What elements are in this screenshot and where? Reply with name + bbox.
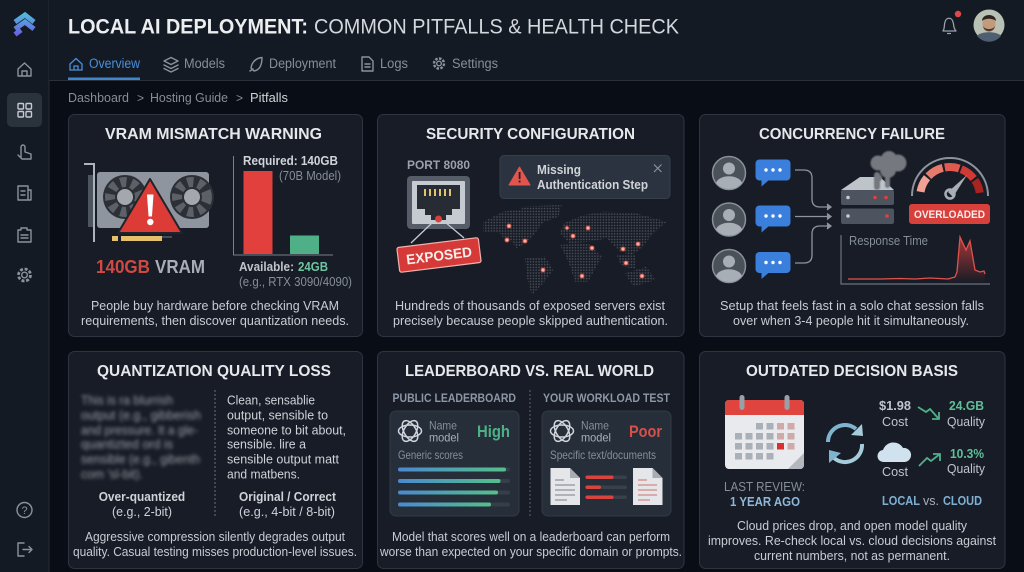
description	[379, 529, 682, 559]
local cost and quality: Quality	[947, 414, 985, 429]
description: improves. Re-check local vs. cloud decisions against	[708, 533, 996, 548]
icon: active grid tile	[7, 93, 42, 127]
description: Model that scores well on a leaderboard can perform	[392, 529, 670, 544]
column label: public leaderboard: PUBLIC LEADERBOARD	[392, 391, 516, 405]
nav tab: logs	[362, 56, 408, 71]
mismatch bars	[586, 476, 627, 499]
label: last review: 1 YEAR AGO	[730, 494, 800, 509]
description: Cloud prices drop, and open model quality	[737, 518, 967, 533]
heading: SECURITY CONFIGURATION	[426, 126, 635, 143]
nav tab: overview	[68, 56, 140, 80]
cloud cost and quality	[877, 442, 985, 479]
avatar	[974, 10, 1004, 42]
clean output text: sensible. lire a	[227, 436, 307, 452]
card: public leaderboard: model	[429, 430, 459, 444]
clean output text: sensible output matt	[227, 452, 339, 466]
icon: exit	[18, 543, 32, 556]
local cost and quality	[879, 398, 985, 429]
panel: VRAM mismatch warning	[68, 114, 362, 336]
blurred over-quantized output text: com 'sl-bit).	[81, 466, 143, 482]
breadcrumb: >	[236, 91, 243, 105]
chart: dotted world map with exposed servers	[483, 205, 666, 294]
icon: output document	[633, 468, 662, 505]
label: local vs cloud: CLOUD	[943, 493, 982, 508]
local cost and quality: 24.GB	[949, 398, 984, 413]
nav tab: models	[164, 56, 225, 72]
icon: help: ?	[21, 505, 28, 517]
heading: QUANTIZATION QUALITY LOSS	[97, 363, 331, 380]
alert: missing authentication step: Missing	[537, 162, 581, 177]
clean output text: and matbens.	[227, 466, 300, 482]
local cost and quality: Cost	[882, 414, 908, 429]
description	[708, 518, 996, 563]
icon: ethernet port exposed	[397, 176, 481, 272]
description: requirements, then discover quantization needs.	[81, 313, 349, 328]
blurred over-quantized output text: This is ra blurrish	[81, 392, 173, 408]
breadcrumb: Pitfalls	[250, 90, 288, 105]
blurred over-quantized output text: output (e.g., gibberish	[81, 408, 201, 422]
title	[68, 16, 679, 38]
icon: refresh cycle	[828, 424, 863, 463]
panel: concurrency failure	[700, 114, 1005, 336]
description: current numbers, not as permanent.	[754, 548, 950, 563]
description	[393, 298, 668, 328]
card: public leaderboard: Name	[429, 418, 457, 432]
card: your workload test: model	[581, 430, 611, 444]
label: 140GB VRAM: 140GB	[96, 257, 150, 277]
icon: notification bell	[943, 11, 961, 34]
description: worse than expected on your specific domain or prompts.	[379, 544, 682, 559]
description	[720, 298, 984, 328]
arrows into server	[795, 170, 831, 263]
blurred over-quantized output text: quantizted ord is	[81, 436, 173, 452]
panel: quantization quality loss	[68, 352, 362, 568]
icon: clipboard	[18, 228, 31, 242]
icon: logo	[15, 15, 34, 34]
icon: settings gear	[18, 269, 30, 281]
heading: OUTDATED DECISION BASIS	[746, 363, 958, 380]
stamp: exposed: EXPOSED	[405, 244, 473, 267]
label: 140GB VRAM	[96, 257, 205, 277]
line chart: response time	[841, 233, 990, 284]
icon: home	[18, 63, 31, 76]
card: your workload test	[542, 411, 671, 516]
labels: over-quantized: Over-quantized	[99, 489, 185, 504]
alert: missing authentication step: Authentication Step	[537, 177, 648, 192]
description: People buy hardware before checking VRAM	[91, 298, 339, 313]
clean output text: output, sensible to	[227, 408, 328, 422]
breadcrumb: Hosting Guide	[150, 90, 228, 105]
labels: over-quantized: (e.g., 2-bit)	[112, 504, 172, 519]
labels: original / correct: Original / Correct	[239, 489, 337, 504]
heading: VRAM MISMATCH WARNING	[105, 126, 322, 143]
label: local vs cloud: vs.	[923, 493, 939, 508]
label: last review: LAST REVIEW:	[724, 479, 805, 494]
blurred over-quantized output text	[81, 392, 201, 482]
title: LOCAL AI DEPLOYMENT:	[68, 16, 308, 38]
label: last review	[724, 479, 805, 509]
cloud cost and quality: Quality	[947, 461, 985, 476]
icon: help	[17, 502, 32, 518]
description: quality. Casual testing misses production-level issues.	[73, 544, 357, 559]
blurred over-quantized output text: and pressure. It a gle-	[81, 422, 198, 438]
description	[81, 298, 349, 328]
column label: your workload test: YOUR WORKLOAD TEST	[543, 391, 671, 405]
icon: graphics card with warning	[84, 164, 214, 242]
labels: original / correct	[239, 489, 337, 519]
icon: news	[18, 186, 31, 200]
bar chart: required vs available	[234, 153, 352, 289]
bar chart: required vs available: (e.g., RTX 3090/4090)	[239, 274, 352, 289]
description: Aggressive compression silently degrades output	[85, 529, 345, 544]
panel: leaderboard vs real world	[378, 352, 684, 568]
icon group: users with chat bubbles	[712, 156, 790, 282]
breadcrumb: Dashboard	[68, 90, 129, 105]
nav tab: logs: Logs	[380, 56, 408, 71]
sidebar	[0, 0, 49, 572]
local cost and quality: $1.98	[879, 398, 911, 413]
nav tab: overview: Overview	[89, 56, 140, 71]
label: local vs cloud: LOCAL	[882, 493, 920, 508]
description: precisely because people skipped authentication.	[393, 313, 668, 328]
alert: missing authentication step	[500, 156, 670, 198]
nav tab: deployment: Deployment	[269, 56, 336, 71]
breadcrumb: >	[137, 91, 144, 105]
labels: original / correct: (e.g., 4-bit / 8-bit)	[239, 504, 335, 519]
clean output text: Clean, sensablie	[227, 392, 315, 408]
heading: CONCURRENCY FAILURE	[759, 126, 945, 143]
card: public leaderboard: Generic scores	[398, 448, 463, 462]
bar chart: required vs available: Required: 140GB	[243, 153, 338, 168]
description: over when 3-4 people hit it simultaneously.	[733, 313, 969, 328]
card: your workload test: Specific text/documents	[550, 448, 656, 462]
nav tab: settings: Settings	[452, 56, 498, 71]
icon: touch hand	[18, 145, 31, 159]
cloud cost and quality: 10.3%	[950, 446, 984, 461]
line chart: response time: Response Time	[849, 233, 928, 248]
icon: source document	[550, 468, 580, 505]
description: Hundreds of thousands of exposed servers exist	[395, 298, 665, 313]
bar chart: required vs available: 24GB	[298, 259, 328, 274]
bar chart: required vs available: Available:	[239, 259, 294, 274]
description	[73, 529, 357, 559]
card: your workload test: Poor	[629, 422, 662, 441]
label: port 8080: PORT 8080	[407, 158, 470, 172]
panel: security configuration	[378, 114, 684, 336]
heading: LEADERBOARD VS. REAL WORLD	[405, 363, 654, 380]
cloud cost and quality: Cost	[882, 464, 908, 479]
card: public leaderboard	[390, 411, 519, 516]
description: Setup that feels fast in a solo chat session falls	[720, 298, 984, 313]
blurred over-quantized output text: sensible (e.g., gibenth	[81, 452, 200, 466]
badge: overloaded: OVERLOADED	[914, 209, 985, 221]
nav tab: settings	[434, 56, 498, 71]
nav tab: models: Models	[184, 56, 225, 71]
labels: over-quantized	[99, 489, 185, 519]
icon: smoking server	[841, 151, 906, 224]
top header bar	[49, 0, 1024, 80]
clean output text: someone to bit about,	[227, 422, 346, 438]
breadcrumb	[68, 90, 288, 105]
gauge: overloaded	[909, 158, 990, 224]
card: your workload test: Name	[581, 418, 609, 432]
bar chart: required vs available: (70B Model)	[279, 168, 341, 183]
label: local vs cloud	[882, 493, 982, 508]
panel: outdated decision basis	[700, 352, 1005, 568]
title: COMMON PITFALLS & HEALTH CHECK	[314, 16, 679, 38]
icon: calendar	[725, 395, 804, 469]
card: public leaderboard: High	[477, 422, 510, 441]
clean output text	[227, 392, 346, 482]
label: 140GB VRAM: VRAM	[155, 257, 205, 277]
